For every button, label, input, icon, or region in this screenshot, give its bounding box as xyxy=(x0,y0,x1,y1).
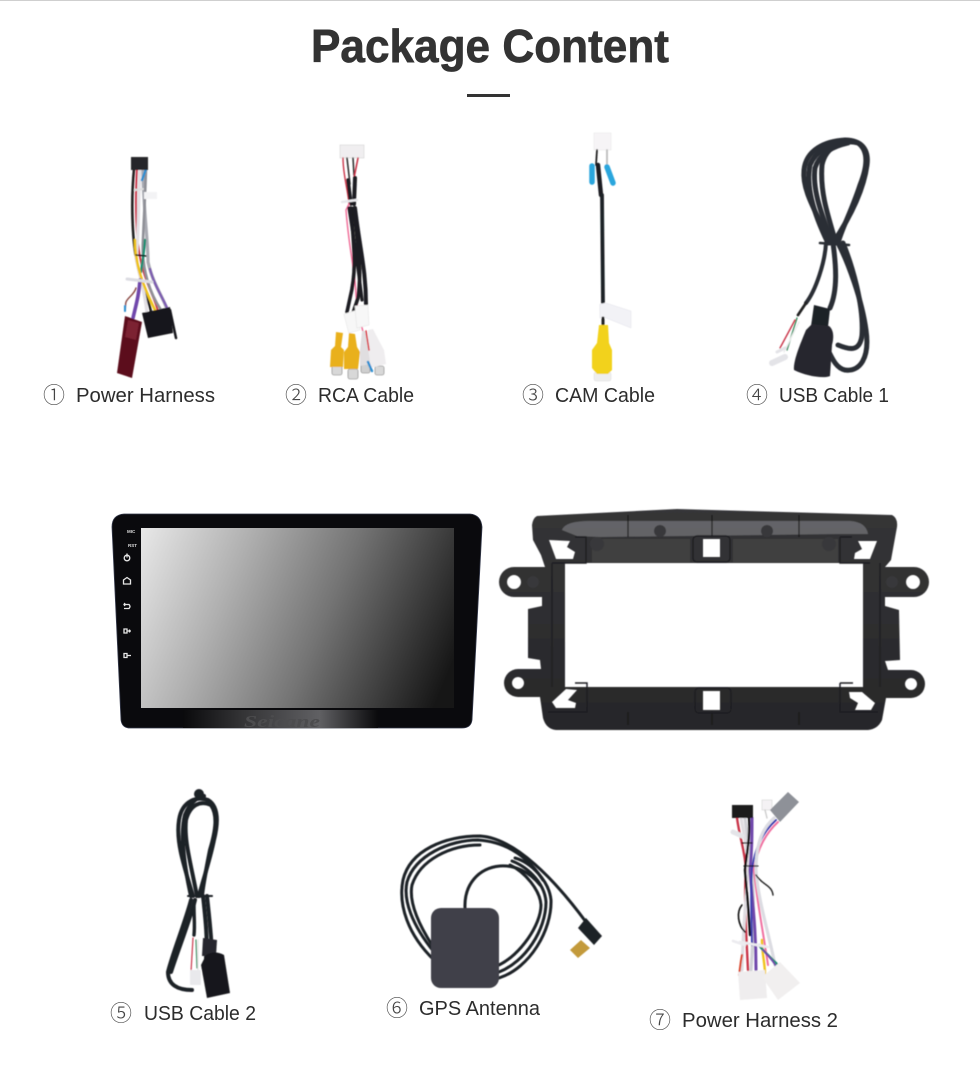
frame body xyxy=(499,509,929,730)
label 4: ④ xyxy=(746,378,768,410)
main display unit xyxy=(112,514,482,731)
frame top channel xyxy=(562,521,868,537)
title: Package Content xyxy=(311,20,669,72)
side labels xyxy=(127,529,137,548)
label 5: USB Cable 2 xyxy=(144,1002,256,1025)
side button icons xyxy=(124,554,131,658)
label 1 xyxy=(43,378,215,410)
label 1: Power Harness xyxy=(76,384,215,407)
label 6: GPS Antenna xyxy=(419,997,541,1020)
item 1: power harness photo xyxy=(117,157,176,378)
label 1: ① xyxy=(43,378,65,410)
frame lugs xyxy=(548,536,880,713)
item 3: CAM cable photo xyxy=(592,133,631,381)
label 2 xyxy=(285,378,414,410)
item 2: RCA cable photo xyxy=(330,145,386,379)
item 6: GPS antenna photo xyxy=(402,836,602,988)
label 3 xyxy=(522,378,655,410)
label 6: ⑥ xyxy=(386,991,408,1023)
label 5 xyxy=(110,996,256,1028)
label 6 xyxy=(386,991,541,1023)
label 5: ⑤ xyxy=(110,996,132,1028)
label 2: ② xyxy=(285,378,307,410)
item 7: power harness 2 photo xyxy=(732,792,800,1000)
title underline xyxy=(467,94,510,97)
label 2: RCA Cable xyxy=(318,384,414,407)
label 3: CAM Cable xyxy=(555,384,655,407)
mounting frame xyxy=(499,509,929,730)
side labels: RST xyxy=(128,543,137,548)
screen xyxy=(141,528,454,708)
label 7 xyxy=(649,1003,838,1035)
label 3: ③ xyxy=(522,378,544,410)
brand logo: Seicane xyxy=(244,712,321,731)
label 4: USB Cable 1 xyxy=(779,384,889,407)
item 4: USB cable 1 photo xyxy=(772,140,867,377)
side labels: MIC xyxy=(127,529,136,534)
label 4 xyxy=(746,378,889,410)
label 7: Power Harness 2 xyxy=(682,1009,838,1032)
item 5: USB cable 2 photo xyxy=(168,789,230,998)
label 7: ⑦ xyxy=(649,1003,671,1035)
bottom reflection xyxy=(183,710,378,728)
unit body xyxy=(112,514,482,728)
